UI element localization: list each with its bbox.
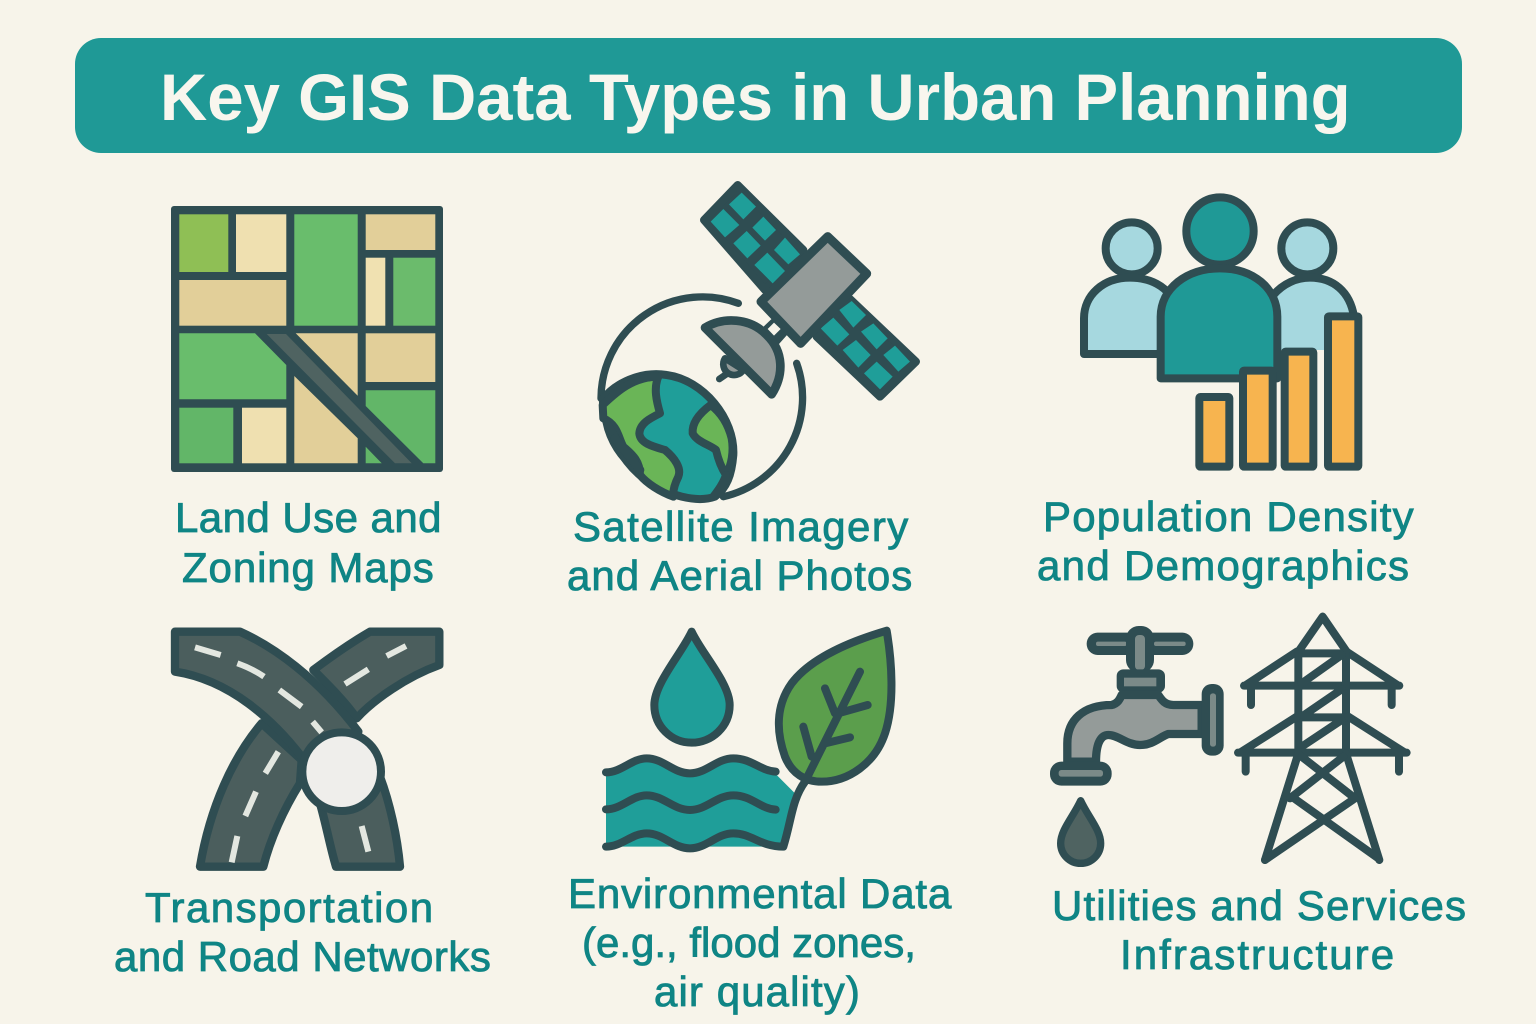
label: environmental data: air quality) bbox=[654, 968, 861, 1015]
label: environmental data: Environmental Data bbox=[568, 870, 952, 917]
road dashes bbox=[195, 646, 406, 862]
label: environmental data bbox=[568, 870, 952, 1015]
label: environmental data: (e.g., flood zones, bbox=[582, 919, 916, 966]
title: Key GIS Data Types in Urban Planning bbox=[160, 61, 1351, 134]
label: transportation: Transportation bbox=[145, 884, 435, 931]
person right bbox=[1273, 222, 1354, 350]
label: utilities: Infrastructure bbox=[1120, 931, 1396, 978]
label: population density bbox=[1037, 493, 1415, 589]
satellite body bbox=[761, 237, 867, 343]
water bbox=[606, 758, 795, 847]
person left bbox=[1084, 222, 1170, 354]
icon: population with bars bbox=[1084, 197, 1358, 467]
label: population density: Population Density bbox=[1043, 493, 1415, 540]
icon: pylon bbox=[1238, 617, 1407, 860]
roundabout bbox=[302, 732, 381, 811]
label: utilities bbox=[1052, 882, 1467, 978]
icon: satellite and earth bbox=[601, 185, 916, 499]
bars bbox=[1199, 316, 1358, 467]
label: satellite imagery bbox=[567, 503, 913, 599]
icon: water drop, waves and leaf bbox=[606, 631, 891, 848]
icon: faucet bbox=[1050, 626, 1224, 863]
dish bbox=[705, 320, 780, 394]
connector bbox=[760, 317, 790, 347]
title banner bbox=[75, 38, 1462, 153]
label: land use: Land Use and bbox=[175, 494, 442, 541]
drop bbox=[654, 632, 730, 743]
person centre bbox=[1161, 197, 1277, 378]
label: transportation bbox=[114, 884, 491, 980]
label: satellite imagery: and Aerial Photos bbox=[567, 552, 913, 599]
label: satellite imagery: Satellite Imagery bbox=[573, 503, 910, 550]
label: transportation: and Road Networks bbox=[114, 933, 491, 980]
orbit bbox=[601, 297, 803, 497]
label: land use: Zoning Maps bbox=[182, 544, 435, 591]
label: land use bbox=[175, 494, 442, 591]
solar panel lower bbox=[817, 299, 916, 397]
earth bbox=[603, 374, 733, 499]
label: utilities: Utilities and Services bbox=[1052, 882, 1467, 929]
solar panel upper bbox=[704, 185, 803, 290]
leaf bbox=[779, 631, 891, 782]
label: population density: and Demographics bbox=[1037, 542, 1410, 589]
icon: road network bbox=[175, 632, 439, 867]
dish feed bbox=[719, 372, 730, 379]
icon: land use map bbox=[171, 206, 443, 472]
